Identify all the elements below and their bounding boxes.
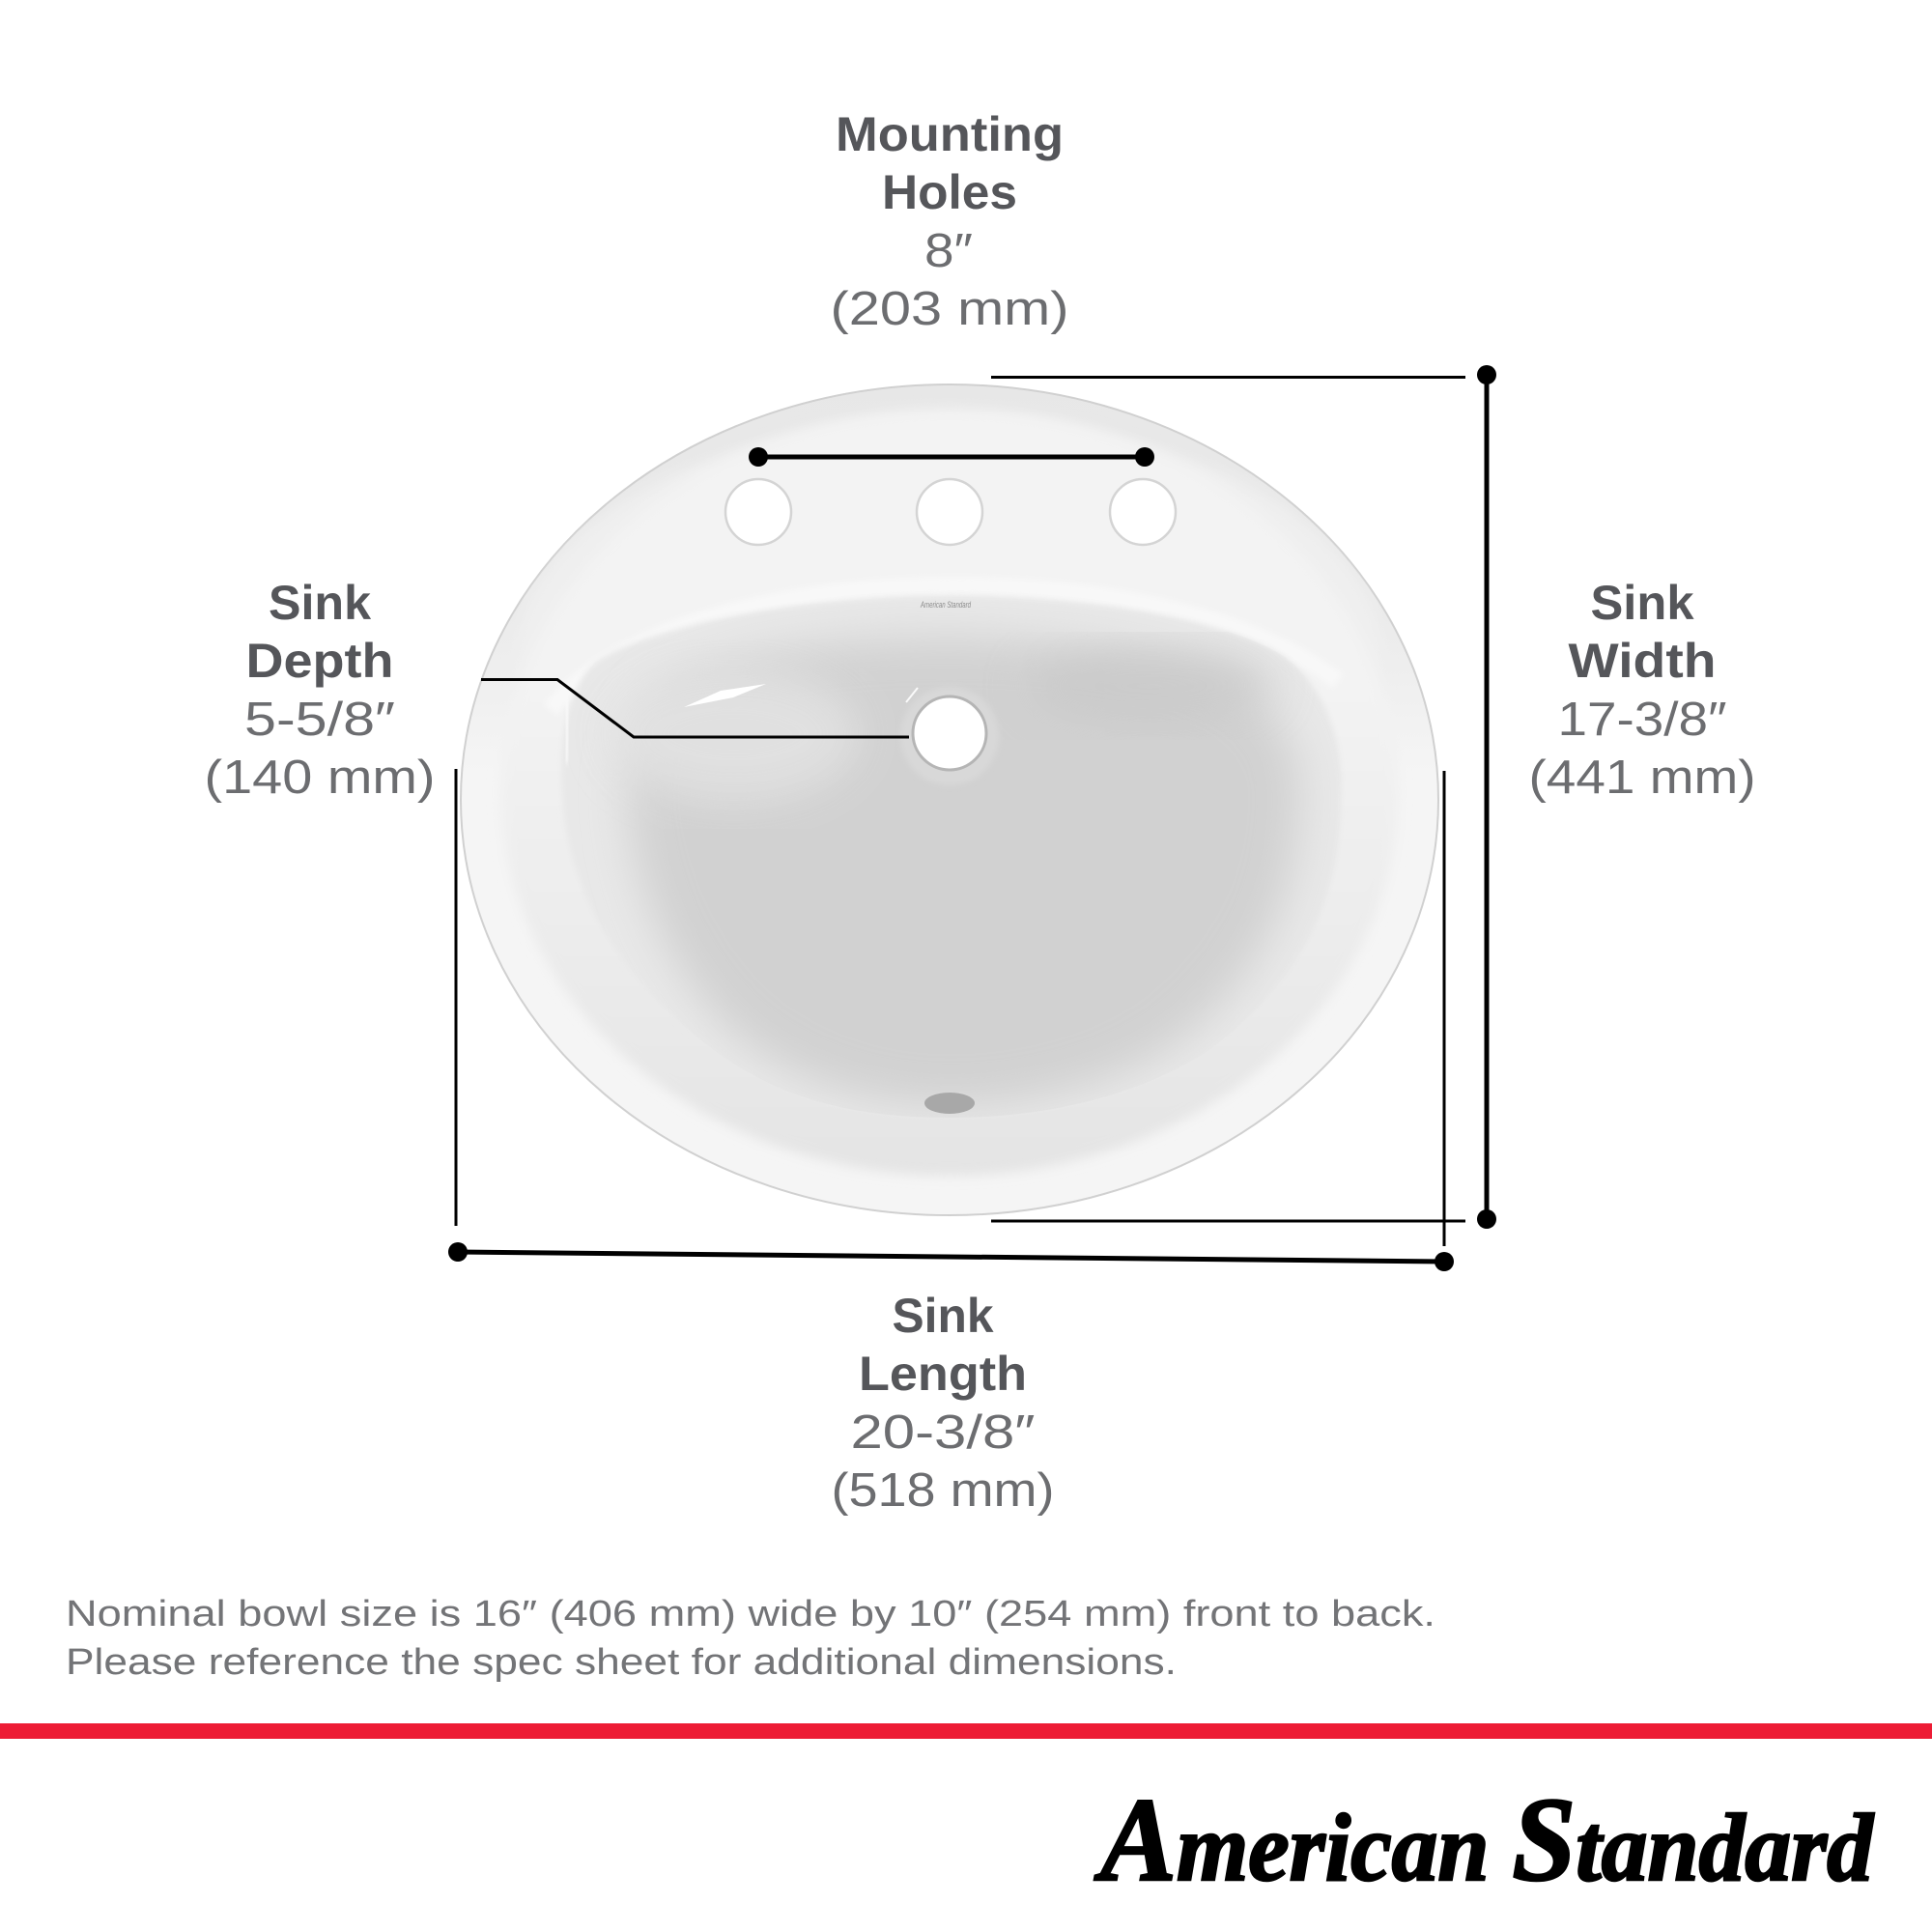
footnote: Nominal bowl size is 16″ (406 mm) wide by 10″ (254 mm) front to back. bbox=[66, 1594, 1435, 1634]
sink width dimension line bbox=[991, 365, 1496, 1229]
label: sink width: Sink bbox=[1590, 576, 1694, 630]
brand mark on bowl: American Standard bbox=[920, 600, 972, 610]
label: mounting holes: Mounting bbox=[836, 107, 1064, 161]
small glare near overflow bbox=[906, 688, 918, 702]
label: sink depth: 5-5/8″ bbox=[244, 694, 395, 746]
faucet hole left bbox=[725, 479, 791, 545]
label: sink width bbox=[1528, 576, 1756, 804]
label: sink depth bbox=[205, 576, 435, 804]
sink deck shading bbox=[500, 409, 1399, 1176]
label: sink depth: (140 mm) bbox=[205, 752, 435, 804]
label: sink width: 17-3/8″ bbox=[1557, 694, 1727, 746]
basin bowl bbox=[561, 596, 1342, 1118]
sink photo bbox=[461, 384, 1438, 1215]
sink outer rim bbox=[461, 384, 1438, 1215]
label: sink length: (518 mm) bbox=[831, 1464, 1055, 1517]
mounting holes dimension line bbox=[749, 447, 1154, 467]
logo: American Standard: American Standard bbox=[1094, 1774, 1875, 1906]
footnote: Please reference the spec sheet for additional dimensions. bbox=[66, 1642, 1177, 1683]
footnote bbox=[66, 1594, 1435, 1683]
label: sink depth: Sink bbox=[269, 576, 371, 630]
bowl highlight lip bbox=[551, 585, 1338, 710]
label: sink length: Sink bbox=[893, 1289, 994, 1343]
label: sink width: Width bbox=[1569, 634, 1716, 688]
label: mounting holes: Holes bbox=[882, 165, 1017, 219]
overflow drain surround bbox=[900, 687, 999, 785]
sink length dimension line bbox=[448, 769, 1454, 1271]
faucet hole right bbox=[1110, 479, 1176, 545]
label: mounting holes: (203 mm) bbox=[831, 283, 1068, 335]
faucet hole centre bbox=[917, 479, 982, 545]
left side highlight bbox=[566, 700, 568, 763]
label: sink depth: Depth bbox=[245, 634, 394, 688]
red divider band bbox=[0, 1723, 1932, 1739]
label: sink length: 20-3/8″ bbox=[850, 1406, 1036, 1459]
label: mounting holes: 8″ bbox=[924, 225, 973, 277]
sink depth leader line bbox=[481, 680, 909, 737]
bowl glare highlight bbox=[684, 684, 766, 707]
bowl drain bbox=[924, 1093, 975, 1114]
label: sink width: (441 mm) bbox=[1528, 752, 1756, 804]
label: sink length: Length bbox=[859, 1347, 1027, 1401]
bowl inner shading bbox=[609, 638, 1300, 1106]
label: mounting holes bbox=[831, 107, 1068, 335]
label: sink length bbox=[831, 1289, 1055, 1517]
overflow drain hole bbox=[913, 696, 986, 770]
